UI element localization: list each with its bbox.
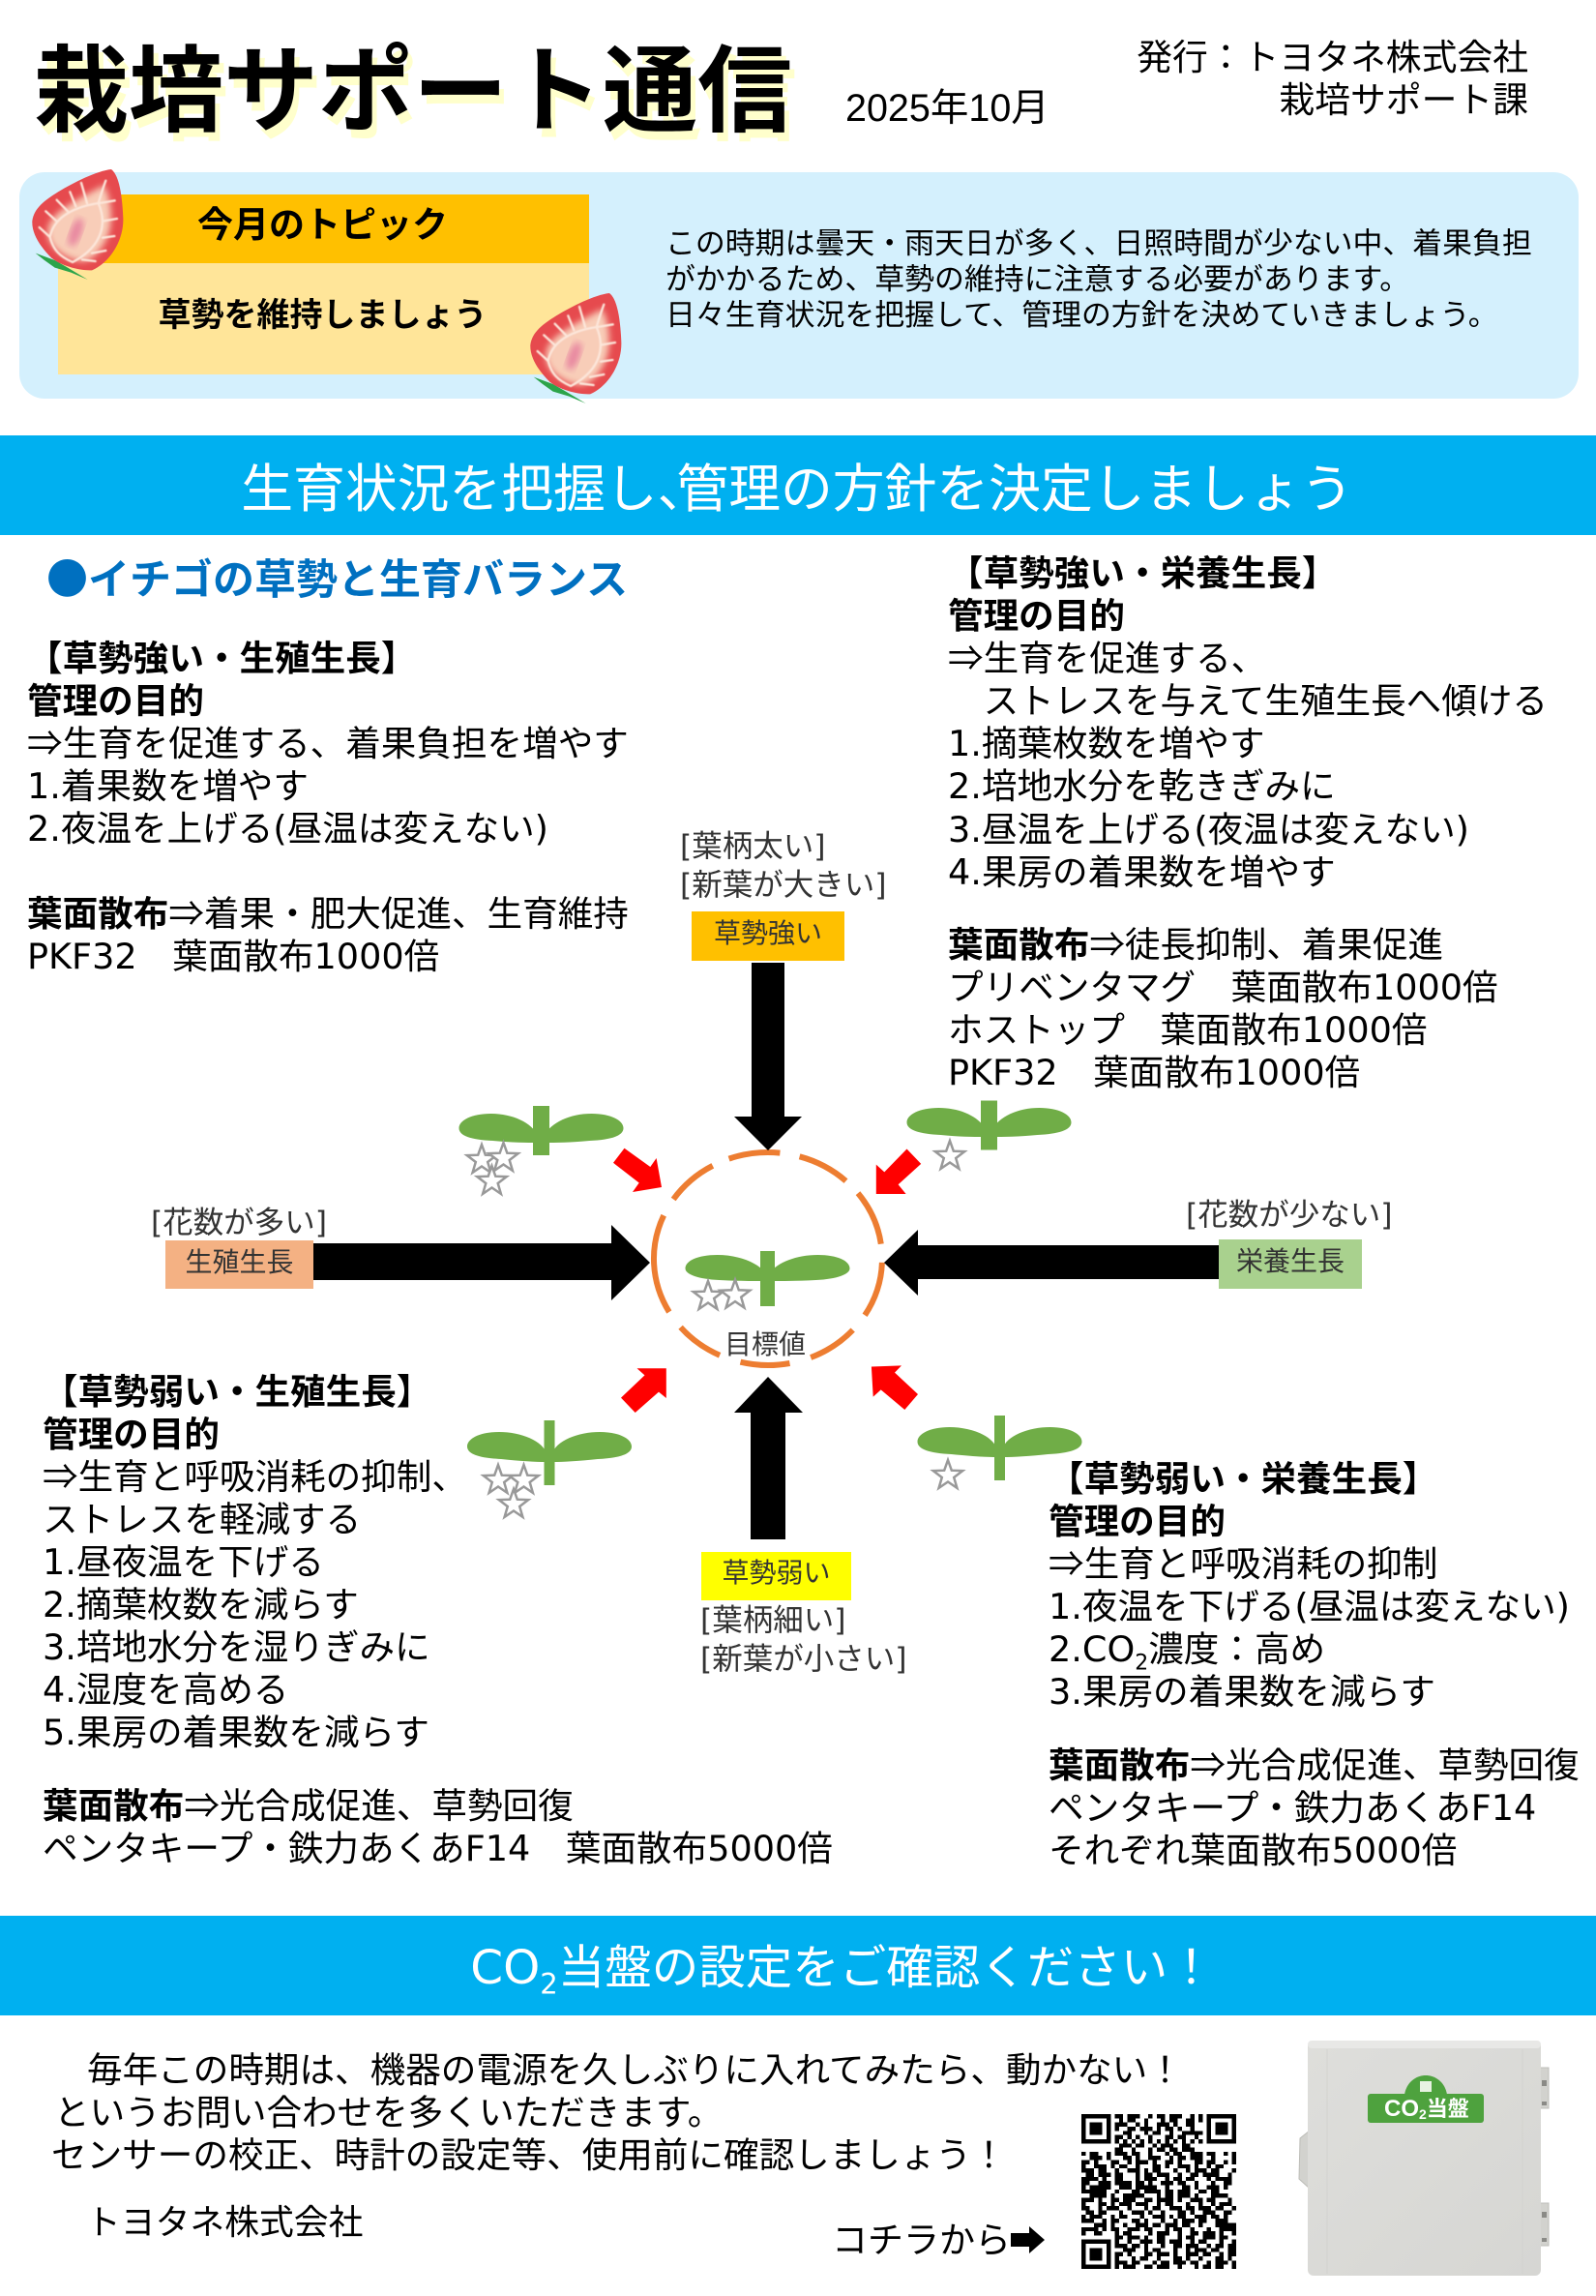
text block: CO2 message: [51, 2050, 1183, 2175]
topic text box: [58, 263, 589, 374]
text block: weak vigor, vegetative growth: 1.夜温を下げる(昼温は変えない): [1049, 1586, 1570, 1627]
notes: strong vigor features: [葉柄太い]: [680, 829, 826, 864]
panel background: [19, 172, 1579, 399]
company name: トヨタネ株式会社: [86, 2203, 363, 2242]
text block: weak vigor, vegetative growth: 管理の目的: [1049, 1502, 1226, 1541]
QR code: [1081, 2114, 1236, 2269]
topic description: 日々生育状況を把握して、管理の方針を決めていきましょう。: [665, 298, 1498, 332]
text block: strong vigor, vegetative growth: 4.果房の着果数を増やす: [948, 851, 1336, 893]
label box: strong vigor: 草勢強い: [714, 918, 822, 948]
label box: weak vigor: 草勢弱い: [722, 1558, 830, 1588]
note: few flowers: [花数が少ない]: [1186, 1198, 1393, 1233]
notes: strong vigor features: [680, 829, 887, 903]
text block: strong vigor, vegetative growth: [948, 553, 1548, 1093]
text block: strong vigor, vegetative growth: 1.摘葉枚数を増やす: [948, 723, 1265, 764]
label box: weak vigor: [701, 1552, 851, 1600]
banner: CO2: CO2当盤の設定をご確認ください！: [470, 1941, 1215, 2001]
text block: strong vigor, vegetative growth: 管理の目的: [948, 596, 1125, 636]
text block: strong vigor, reproductive growth: [27, 639, 629, 977]
text block: CO2 message: というお問い合わせを多くいただきます。: [54, 2093, 723, 2132]
text block: strong vigor, reproductive growth: 1.着果数を増やす: [27, 765, 309, 807]
text block: weak vigor, vegetative growth: [1049, 1459, 1580, 1871]
topic heading box: [58, 194, 589, 263]
banner: growth status: 生育状況を把握し、管理の方針を決定しましょう: [241, 461, 1353, 519]
red arrow: bottom left: [621, 1368, 666, 1413]
text block: CO2 message: 毎年この時期は、機器の電源を久しぶりに入れてみたら、動かない！: [87, 2050, 1183, 2090]
CO2 logo: [1368, 2075, 1484, 2123]
mounting tabs: [1299, 2068, 1549, 2246]
text block: strong vigor, vegetative growth: 2.培地水分を乾きぎみに: [948, 765, 1336, 807]
text block: strong vigor, reproductive growth: 管理の目的: [27, 681, 204, 721]
topic description: この時期は曇天・雨天日が多く、日照時間が少ない中、着果負担: [665, 226, 1532, 260]
red arrow: top right: [876, 1149, 921, 1194]
text block: weak vigor, reproductive growth: 管理の目的: [43, 1415, 220, 1454]
text block: strong vigor, vegetative growth: プリベンタマグ 葉面散布1000倍: [948, 967, 1498, 1008]
text block: weak vigor, vegetative growth: 【草勢弱い・栄養生長】: [1049, 1459, 1437, 1499]
label box: reproductive growth: 生殖生長: [185, 1247, 294, 1277]
topic description: がかかるため、草勢の維持に注意する必要があります。: [665, 262, 1409, 296]
CO2 logo: 2: [1419, 2106, 1427, 2122]
text block: strong vigor, reproductive growth: ⇒生育を促進する、着果負担を増やす: [27, 715, 629, 766]
title: 栽培サポート通信: [34, 38, 792, 144]
publisher: 栽培サポート課: [1279, 80, 1528, 120]
text block: weak vigor, vegetative growth: 3.果房の着果数を減らす: [1049, 1671, 1435, 1713]
text block: weak vigor, reproductive growth: 2.摘葉枚数を減らす: [43, 1584, 359, 1625]
text block: CO2 message: センサーの校正、時計の設定等、使用前に確認しましょう！: [51, 2135, 1007, 2175]
text block: strong vigor, reproductive growth: 【草勢強い・生殖生長】: [27, 639, 416, 677]
text block: weak vigor, vegetative growth: それぞれ葉面散布5000倍: [1049, 1830, 1457, 1871]
seedling: bottom right: [917, 1416, 1081, 1488]
text block: weak vigor, reproductive growth: ストレスを軽減する: [43, 1499, 361, 1540]
notes: weak vigor features: [新葉が小さい]: [700, 1642, 907, 1677]
arrow: vegetative growth: [884, 1230, 1219, 1296]
text block: strong vigor, vegetative growth: ホストップ 葉面散布1000倍: [948, 1009, 1427, 1051]
text block: strong vigor, vegetative growth: PKF32 葉面散布1000倍: [948, 1052, 1360, 1093]
arrow: reproductive growth: [313, 1225, 650, 1300]
notes: strong vigor features: [新葉が大きい]: [680, 868, 887, 903]
text block: weak vigor, reproductive growth: 5.果房の着果数を減らす: [43, 1712, 429, 1753]
text block: weak vigor, reproductive growth: ⇒生育と呼吸消耗の抑制、: [43, 1448, 467, 1500]
label box: vegetative growth: [1219, 1239, 1362, 1289]
note: many flowers: [花数が多い]: [151, 1206, 327, 1240]
text block: strong vigor, vegetative growth: 【草勢強い・栄養生長】: [948, 553, 1337, 593]
red arrow: top left: [613, 1148, 662, 1192]
text block: strong vigor, vegetative growth: 3.昼温を上げる(夜温は変えない): [948, 809, 1469, 850]
text block: strong vigor, vegetative growth: ⇒生育を促進する、: [948, 630, 1266, 681]
label box: vegetative growth: 栄養生長: [1236, 1246, 1345, 1276]
red arrow: bottom right: [872, 1365, 918, 1410]
target circle: [654, 1152, 882, 1365]
device: CO2 controller: [1298, 2041, 1550, 2276]
publisher: 発行：トヨタネ株式会社: [1137, 38, 1528, 77]
banner: CO2: [0, 1916, 1596, 2015]
text block: weak vigor, reproductive growth: 3.培地水分を湿りぎみに: [43, 1626, 430, 1668]
seedling: bottom left: [467, 1420, 632, 1517]
CO2 logo: 当盤: [1427, 2097, 1469, 2121]
topic description: [665, 226, 1532, 332]
arrow: weak vigor: [734, 1377, 803, 1539]
seedling: top right: [907, 1101, 1072, 1169]
publisher: [1137, 38, 1528, 120]
text block: strong vigor, reproductive growth: 2.夜温を上げる(昼温は変えない): [27, 808, 548, 850]
text block: strong vigor, vegetative growth: ストレスを与えて生殖生長へ傾ける: [984, 680, 1548, 722]
text block: strong vigor, reproductive growth: PKF32 葉面散布1000倍: [27, 936, 439, 977]
text block: strong vigor, reproductive growth: 葉面散布⇒着果・肥大促進、生育維持: [27, 885, 629, 937]
panel: monthly topic: [19, 172, 1579, 399]
icon: arrow to QR: [1011, 2226, 1045, 2253]
text block: strong vigor, vegetative growth: 葉面散布⇒徒長抑制、着果促進: [948, 916, 1443, 968]
text block: weak vigor, reproductive growth: ペンタキープ・鉄力あくあF14 葉面散布5000倍: [43, 1828, 833, 1869]
label: target value: 目標値: [724, 1329, 806, 1359]
text block: weak vigor, reproductive growth: 1.昼夜温を下げる: [43, 1541, 324, 1583]
seedling: center target: [685, 1251, 849, 1309]
text block: weak vigor, vegetative growth: 葉面散布⇒光合成促進、草勢回復: [1049, 1737, 1580, 1788]
notes: weak vigor features: [葉柄細い]: [700, 1603, 846, 1638]
QR prompt: コチラから: [832, 2221, 1011, 2260]
text block: weak vigor, reproductive growth: [43, 1372, 833, 1869]
text block: weak vigor, reproductive growth: 4.湿度を高める: [43, 1669, 288, 1711]
section heading: ●イチゴの草勢と生育バランス: [46, 547, 628, 607]
CO2 logo: CO: [1384, 2096, 1419, 2122]
label box: strong vigor: [692, 911, 844, 961]
text block: weak vigor, vegetative growth: ⇒生育と呼吸消耗の抑制: [1049, 1536, 1437, 1587]
notes: weak vigor features: [700, 1603, 907, 1677]
topic text box: 草勢を維持しましょう: [159, 297, 488, 334]
banner: growth status: [0, 435, 1596, 535]
text block: weak vigor, vegetative growth: ペンタキープ・鉄力あくあF14: [1049, 1787, 1536, 1829]
icon: strawberry left: [32, 169, 621, 403]
date: 2025年10月: [845, 87, 1049, 130]
text block: weak vigor, reproductive growth: 【草勢弱い・生殖生長】: [43, 1372, 431, 1411]
arrow: strong vigor: [734, 963, 802, 1150]
seedling: top left: [458, 1106, 623, 1194]
enclosure body: [1308, 2041, 1541, 2276]
topic heading box: 今月のトピック: [197, 205, 448, 245]
text block: weak vigor, vegetative growth: 2.CO2濃度：高め: [1049, 1628, 1325, 1676]
label box: reproductive growth: [165, 1240, 313, 1289]
text block: weak vigor, reproductive growth: 葉面散布⇒光合成促進、草勢回復: [43, 1777, 574, 1829]
